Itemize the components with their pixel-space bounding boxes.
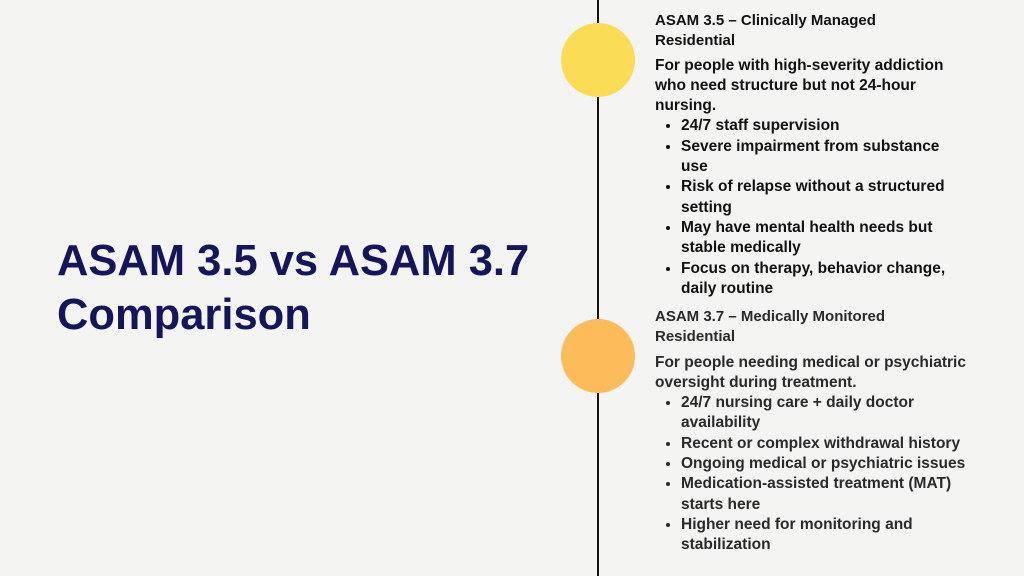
- bullets 3.7: 24/7 nursing care + daily doctor: [681, 394, 914, 411]
- bullets 3.5: setting: [681, 199, 732, 216]
- heading 3.7: ASAM 3.7 – Medically Monitored: [655, 308, 885, 325]
- description 3.7: [655, 354, 966, 391]
- bullets 3.5: stable medically: [681, 239, 801, 256]
- bullets 3.5: Risk of relapse without a structured: [681, 178, 945, 195]
- description 3.5: For people with high-severity addiction: [655, 57, 944, 74]
- title: [57, 237, 529, 339]
- title: Comparison: [57, 291, 311, 339]
- panel: ASAM 3.7: [655, 308, 966, 553]
- title: ASAM 3.5 vs ASAM 3.7: [57, 237, 529, 285]
- heading 3.5: ASAM 3.5 – Clinically Managed: [655, 12, 876, 29]
- bullets 3.7: Medication-assisted treatment (MAT): [681, 475, 951, 492]
- panel: ASAM 3.5: [655, 12, 945, 297]
- heading 3.7: Residential: [655, 328, 735, 345]
- heading 3.5: [655, 12, 876, 49]
- bullets 3.7: Higher need for monitoring and: [681, 516, 913, 533]
- bullets 3.5: Severe impairment from substance: [681, 138, 939, 155]
- bullets 3.7: Ongoing medical or psychiatric issues: [681, 455, 965, 472]
- description 3.5: [655, 57, 944, 114]
- bullets 3.5: 24/7 staff supervision: [681, 117, 840, 134]
- description 3.7: For people needing medical or psychiatric: [655, 354, 966, 371]
- icon: yellow circle: [561, 23, 635, 97]
- timeline line: [597, 0, 599, 576]
- heading 3.7: [655, 308, 885, 345]
- heading 3.5: Residential: [655, 32, 735, 49]
- bullets 3.5: daily routine: [681, 280, 773, 297]
- bullets 3.5: use: [681, 158, 708, 175]
- bullets 3.5: May have mental health needs but: [681, 219, 933, 236]
- description 3.5: nursing.: [655, 97, 716, 114]
- description 3.7: oversight during treatment.: [655, 374, 857, 391]
- bullets 3.5: Focus on therapy, behavior change,: [681, 260, 945, 277]
- bullets 3.7: starts here: [681, 496, 760, 513]
- bullets 3.5: [666, 117, 945, 297]
- bullets 3.7: stabilization: [681, 536, 771, 553]
- bullets 3.7: [666, 394, 965, 553]
- bullets 3.7: availability: [681, 414, 760, 431]
- icon: orange circle: [561, 319, 635, 393]
- bullets 3.7: Recent or complex withdrawal history: [681, 435, 960, 452]
- description 3.5: who need structure but not 24-hour: [655, 77, 916, 94]
